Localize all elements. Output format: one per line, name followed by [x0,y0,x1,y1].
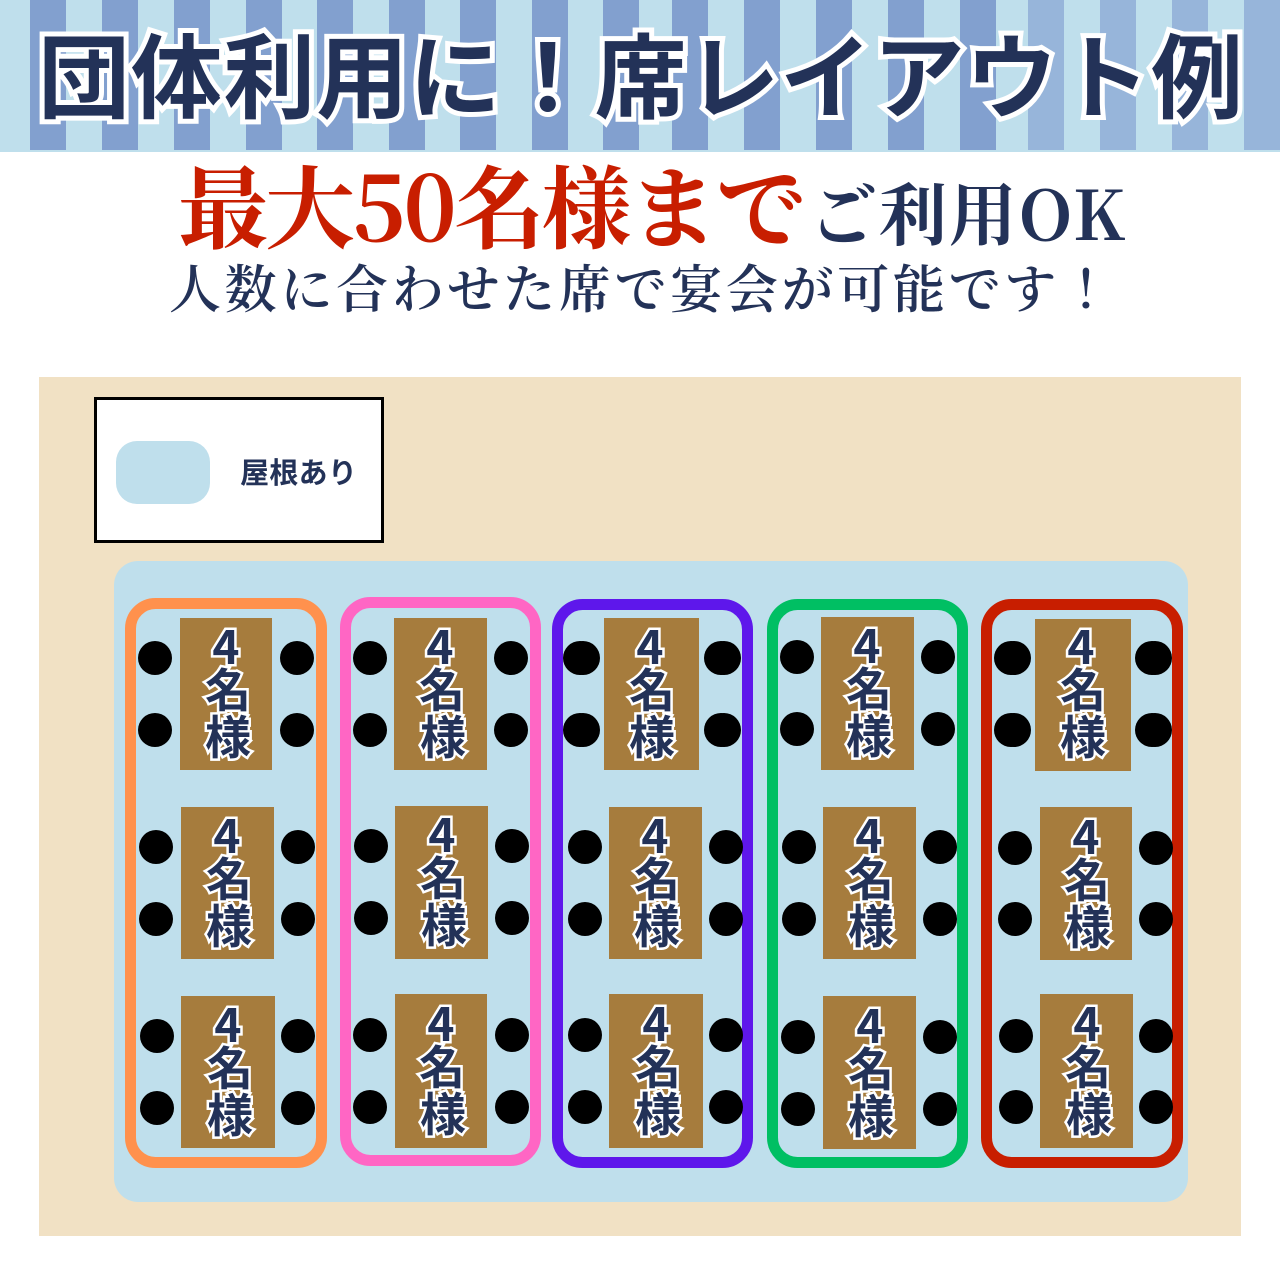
table: column 5 row 2 [998,802,1173,960]
table: column 1 row 3 [140,990,315,1148]
table: column 4 row 1: 4 [853,611,881,677]
table: column 3 row 3 [568,989,743,1148]
table: column 5 row 3: 様 [1066,1079,1112,1145]
table: column 1 row 3: 名 [207,1033,253,1099]
headline: up to 50 guests: 最大50名様まで [178,137,806,267]
table: column 4 row 2 [782,801,957,959]
table: column 3 row 2: 名 [634,844,680,910]
group outline: purple [558,604,748,1162]
title: 団体利用に！席レイアウト例 [38,5,1243,138]
table: column 5 row 2: 4 [1072,802,1100,868]
table: column 4 row 3 [781,991,957,1149]
table: column 1 row 3: 様 [207,1080,253,1146]
table: column 3 row 1: 様 [629,702,675,768]
table: column 1 row 2 [139,801,315,959]
table: column 3 row 1 [563,612,741,770]
group outline: red [986,604,1178,1162]
group outline: pink [346,602,536,1160]
table: column 4 row 3: 名 [848,1034,894,1100]
group outline: green [772,604,962,1162]
table: column 3 row 1: 名 [629,655,675,721]
table: column 1 row 1: 名 [205,655,251,721]
legend swatch: roofed area [116,441,210,504]
panel: roofed area [114,561,1188,1202]
table: column 4 row 1 [780,611,955,770]
table: column 3 row 1: 4 [636,612,664,678]
panel: floor plan background [39,377,1241,1236]
table: column 4 row 2: 名 [848,844,894,910]
table: column 1 row 2: 名 [206,844,252,910]
table: column 2 row 2: 4 [428,800,456,866]
table: column 4 row 2: 様 [848,891,894,957]
table: column 5 row 2: 名 [1064,845,1110,911]
table: column 3 row 3: 様 [635,1079,681,1145]
table: column 2 row 3 [353,989,529,1148]
subheading: 人数に合わせた席で宴会が可能です！ [169,248,1112,323]
table: column 5 row 1 [994,612,1172,771]
table: column 1 row 1 [138,612,314,770]
table: column 1 row 1: 様 [205,702,251,768]
headline suffix: ご利用OK [809,163,1126,260]
table: column 1 row 3: 4 [214,990,242,1056]
table: column 1 row 1: 4 [212,612,240,678]
table: column 2 row 2: 名 [420,843,466,909]
table: column 2 row 2 [354,800,529,959]
table: column 3 row 3: 名 [635,1032,681,1098]
legend [96,398,382,542]
legend label: 屋根あり [240,450,357,492]
table: column 5 row 1: 様 [1060,702,1106,768]
table: column 4 row 1: 様 [846,701,892,767]
table: column 2 row 1: 4 [426,612,454,678]
table: column 1 row 2: 4 [213,801,241,867]
table: column 2 row 1: 名 [419,655,465,721]
table: column 2 row 1: 様 [420,702,466,768]
table: column 2 row 3: 名 [419,1032,465,1098]
table: column 4 row 1: 名 [846,654,892,720]
table: column 3 row 2 [568,801,743,959]
table: column 4 row 2: 4 [855,801,883,867]
table: column 5 row 3 [999,989,1173,1148]
group outline: orange [130,604,322,1162]
table: column 4 row 3: 様 [848,1081,894,1147]
table: column 5 row 3: 4 [1073,989,1101,1055]
table: column 5 row 3: 名 [1065,1032,1111,1098]
table: column 2 row 3: 4 [427,989,455,1055]
table: column 2 row 1 [353,612,528,770]
table: column 5 row 2: 様 [1065,892,1111,958]
table: column 3 row 2: 様 [634,891,680,957]
table: column 5 row 1: 名 [1060,655,1106,721]
table: column 4 row 3: 4 [856,991,884,1057]
table: column 2 row 3: 様 [420,1079,466,1145]
table: column 3 row 2: 4 [641,801,669,867]
table: column 2 row 2: 様 [421,890,467,956]
table: column 5 row 1: 4 [1067,612,1095,678]
table: column 3 row 3: 4 [642,989,670,1055]
header banner [0,0,1280,152]
table: column 1 row 2: 様 [206,891,252,957]
